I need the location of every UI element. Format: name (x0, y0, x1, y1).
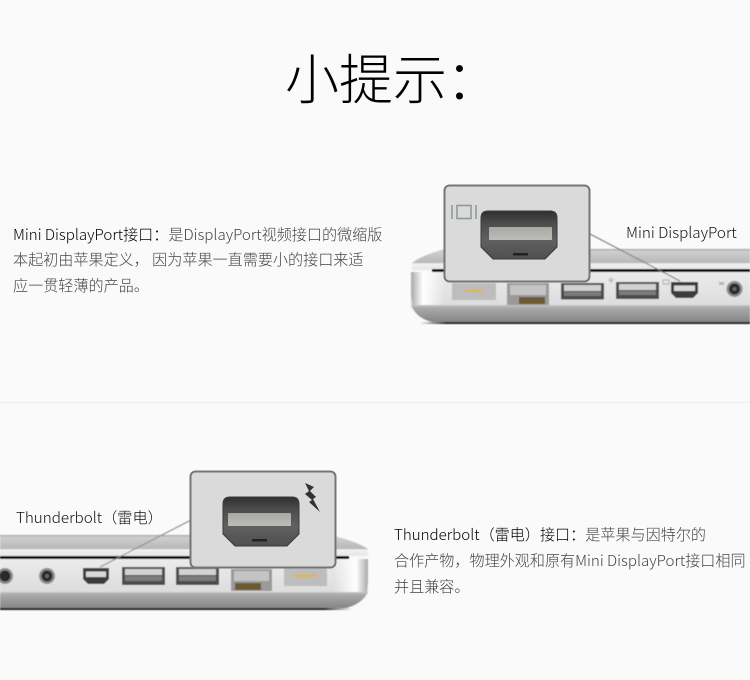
port closeup (481, 211, 557, 259)
text block: Thunderbolt description: 合作产物，物理外观和原有Mini DisplayPort接口相同 (394, 549, 746, 571)
port: audio (39, 568, 55, 584)
text block: Mini DisplayPort description: 应一贯轻薄的产品。 (13, 274, 149, 296)
port: Thunderbolt (83, 568, 109, 584)
text block: Thunderbolt description: 并且兼容。 (394, 575, 469, 597)
port closeup (223, 497, 299, 546)
port: USB (616, 282, 659, 299)
text block: Mini DisplayPort description: 本起初由苹果定义， 因为苹果一直需要小的接口来适 (13, 248, 364, 270)
text block: Thunderbolt description (394, 523, 746, 597)
text block: Mini DisplayPort description (13, 223, 382, 296)
port: USB (176, 567, 219, 585)
port: Mini DisplayPort (671, 282, 698, 298)
leader line (100, 520, 191, 567)
leader line (590, 234, 680, 281)
laptop: bottom image (0, 520, 368, 610)
port: audio (726, 281, 742, 297)
callout card: Thunderbolt (190, 472, 336, 568)
callout card: Mini DisplayPort (444, 186, 590, 282)
label: Mini DisplayPort: Mini DisplayPort (626, 221, 737, 243)
port: magsafe (284, 568, 327, 586)
icon: lightning bolt (305, 483, 320, 512)
port: ethernet (231, 569, 272, 591)
port: USB (561, 283, 604, 300)
icon: audio symbol (719, 282, 724, 285)
icon: display symbol (663, 280, 669, 284)
port: headphone (0, 568, 13, 584)
icon: Mini DisplayPort symbol (452, 205, 476, 219)
laptop: top image (411, 234, 750, 324)
divider (0, 402, 750, 403)
text block: Mini DisplayPort description: Mini DisplayPort接口：是DisplayPort视频接口的微缩版 (13, 223, 382, 245)
text block: Thunderbolt description: Thunderbolt（雷电）接口：是苹果与因特尔的 (394, 523, 706, 545)
title: 小提示： (285, 36, 500, 115)
port: magsafe (452, 283, 496, 300)
port: USB (122, 567, 165, 585)
label: Thunderbolt: Thunderbolt（雷电） (16, 506, 163, 528)
icon: USB symbol (608, 277, 614, 283)
port: ethernet (507, 283, 549, 305)
